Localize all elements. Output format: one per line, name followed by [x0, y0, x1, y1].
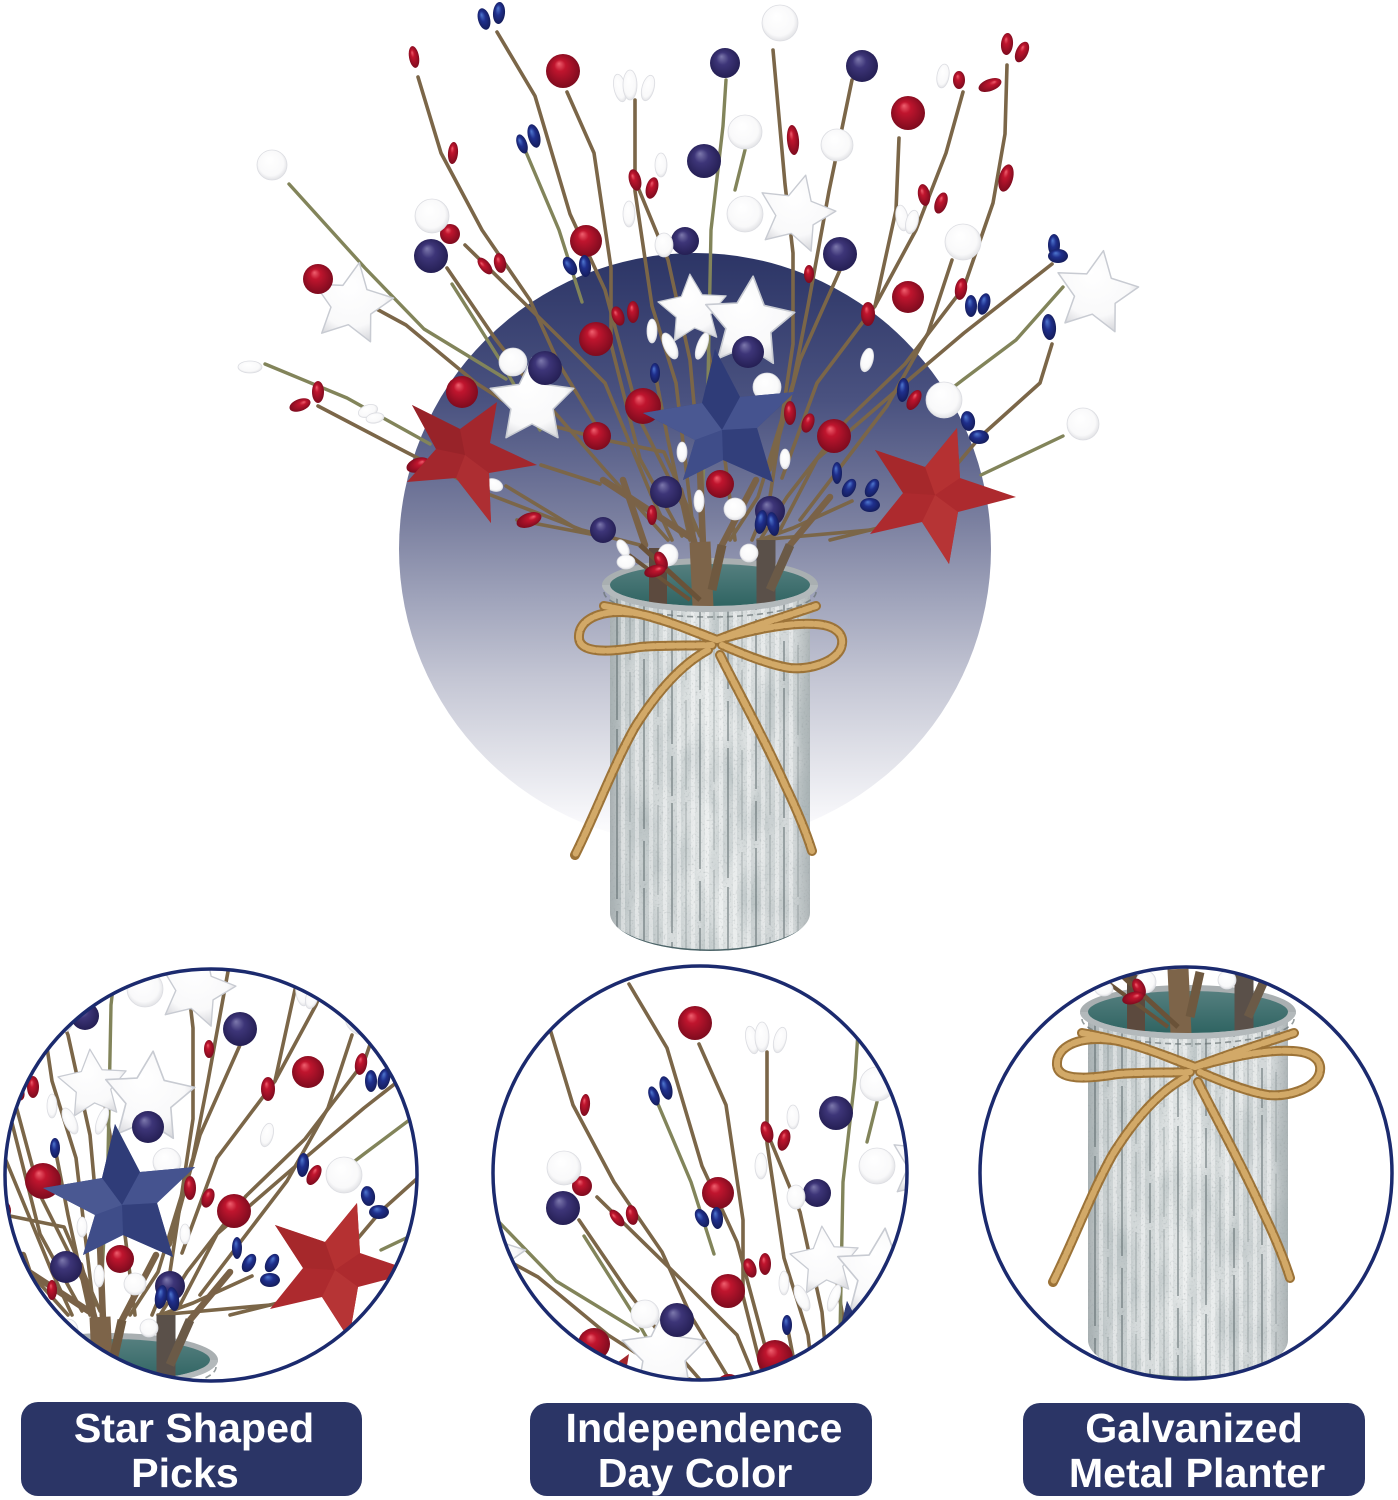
branch bases and low berries in the planter mouth: [614, 538, 790, 607]
red barn star, right: [870, 428, 1016, 564]
label: galvanized metal planter: [1023, 1403, 1365, 1496]
jute rope bow: [575, 606, 842, 855]
label: galvanized metal planter: Galvanized: [1085, 1405, 1303, 1451]
label: star shaped picks: Star Shaped: [74, 1405, 314, 1451]
planter body: [605, 585, 815, 955]
planter rim: [602, 585, 818, 617]
label: independence day color: Day Color: [598, 1450, 792, 1496]
detail circle: star picks: [3, 967, 419, 1383]
upper bouquet: branches, berries and stars: [238, 2, 1144, 545]
navy barn star, centre: [643, 349, 795, 482]
gradient background circle: [399, 253, 991, 845]
white stars: [307, 166, 1144, 438]
label: star shaped picks: Picks: [131, 1450, 239, 1496]
detail circle: independence day colors: [491, 964, 909, 1382]
red barn star, left: [407, 402, 537, 523]
large berries: [257, 5, 1099, 543]
teardrop pip berries: [238, 2, 1068, 537]
label: independence day color: Independence: [566, 1405, 842, 1451]
branches: [265, 32, 1063, 545]
label: independence day color: [530, 1403, 872, 1496]
label: galvanized metal planter: Metal Planter: [1069, 1450, 1325, 1496]
detail circle: metal planter: [980, 965, 1392, 1382]
label: star shaped picks: [21, 1402, 362, 1496]
planter interior: [602, 558, 818, 612]
